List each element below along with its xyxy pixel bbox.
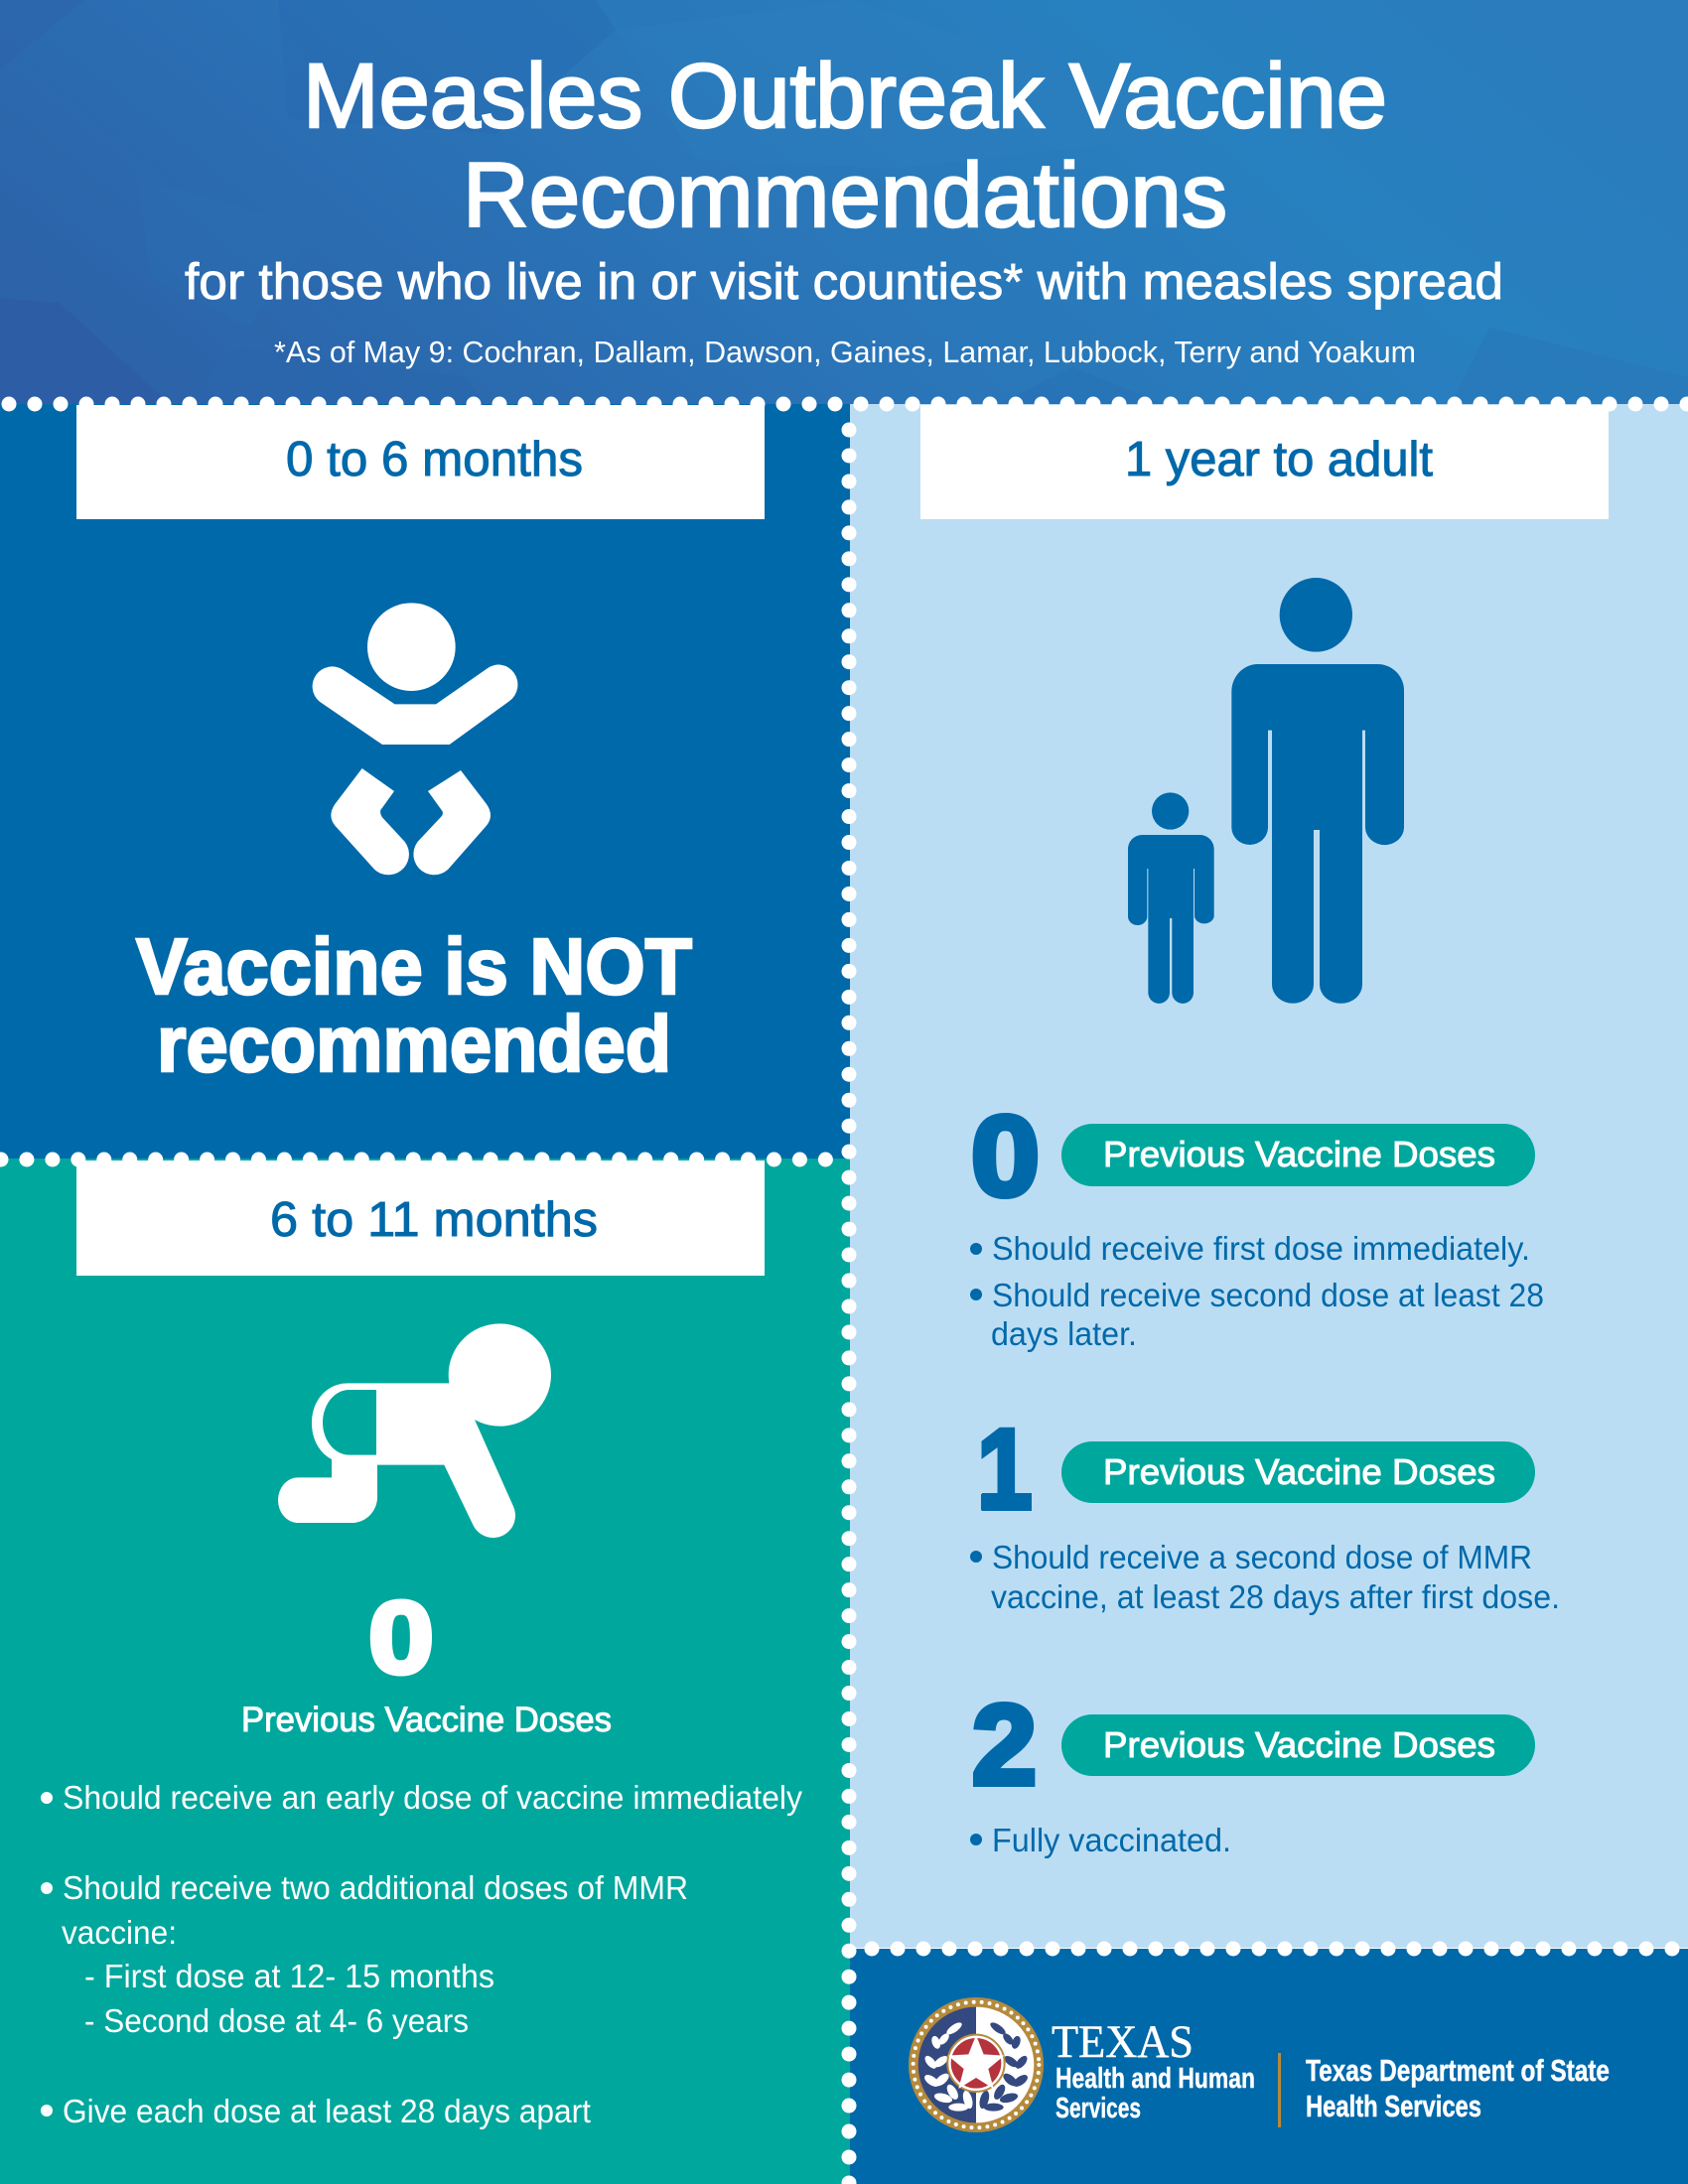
recommendations list: 6 to 11 months: - First dose at 12- 15 months [84,1958,494,1994]
recommendations list: 6 to 11 months: vaccine: [62,1914,177,1951]
section: 1 previous dose [970,1407,1560,1615]
panel: footer logos [850,1949,1688,2184]
title: Measles Outbreak Vaccine [303,46,1387,147]
icon: crawling baby [278,1323,551,1538]
recommendations list: 6 to 11 months [41,1779,802,2129]
section: 2 previous doses: Fully vaccinated. [992,1822,1231,1858]
title [303,46,1387,246]
title: Recommendations [463,145,1227,246]
section: 1 previous dose: Previous Vaccine Doses [1103,1451,1495,1492]
section: 0 previous doses: Previous Vaccine Doses [1103,1134,1495,1174]
section: 0 previous doses: Should receive second dose at least 28 [992,1277,1544,1313]
logo text: Texas Health and Human Services: Health and Human [1055,2063,1255,2095]
section: 2 previous doses [970,1683,1535,1858]
age heading: 1 year to adult: 1 year to adult [1125,433,1433,486]
statement: vaccine not recommended: Vaccine is NOT [136,922,692,1011]
icon: baby [313,603,517,875]
dose count: 0: 0 [368,1580,434,1695]
age heading: 0 to 6 months: 0 to 6 months [286,433,583,486]
county footnote: *As of May 9: Cochran, Dallam, Dawson, Gaines, Lamar, Lubbock, Terry and Yoakum [274,335,1416,369]
section: 2 previous doses: Previous Vaccine Doses [1103,1724,1495,1765]
label: previous vaccine doses: Previous Vaccine Doses [241,1701,612,1739]
recommendations list: 6 to 11 months: - Second dose at 4- 6 years [84,2002,469,2039]
icon: adult and child [1128,578,1404,1004]
recommendations list: 6 to 11 months: Give each dose at least 28 days apart [63,2093,591,2129]
logo: Texas state seal [909,1997,1044,2132]
logo text: Texas Department of State Health Services [1306,2053,1610,2123]
section: 0 previous doses [970,1094,1544,1352]
age heading: 1 year to adult [920,405,1609,519]
age heading: 6 to 11 months: 6 to 11 months [270,1193,598,1247]
logo text: Texas Health and Human Services [1052,2016,1255,2124]
section: 0 previous doses: Should receive first dose immediately. [992,1230,1530,1267]
section: 1 previous dose: vaccine, at least 28 days after first dose. [991,1578,1560,1615]
subtitle: for those who live in or visit counties* with measles spread [185,253,1503,310]
logo text: Texas Health and Human Services: TEXAS [1052,2016,1194,2068]
panel: 6 to 11 months [0,1159,850,2184]
age heading: 0 to 6 months [76,405,765,519]
recommendations list: 6 to 11 months: Should receive an early dose of vaccine immediately [63,1779,802,1816]
panel: 1 year to adult [850,404,1688,1948]
recommendations list: 6 to 11 months: Should receive two additional doses of MMR [63,1869,688,1906]
header banner [0,0,1688,407]
section: 1 previous dose: 1 [977,1407,1031,1533]
age heading: 6 to 11 months [76,1160,765,1276]
logo text: Texas Health and Human Services: Services [1055,2093,1141,2124]
statement: vaccine not recommended: recommended [157,1000,671,1088]
logo text: Texas Department of State Health Services: Health Services [1306,2089,1481,2123]
section: 0 previous doses: 0 [971,1094,1040,1220]
statement: vaccine not recommended [136,922,692,1088]
section: 1 previous dose: Should receive a second dose of MMR [992,1539,1532,1575]
logo text: Texas Department of State Health Services: Texas Department of State [1306,2053,1610,2088]
panel: 0 to 6 months [0,404,850,1159]
section: 2 previous doses: 2 [972,1683,1037,1809]
section: 0 previous doses: days later. [991,1315,1137,1352]
